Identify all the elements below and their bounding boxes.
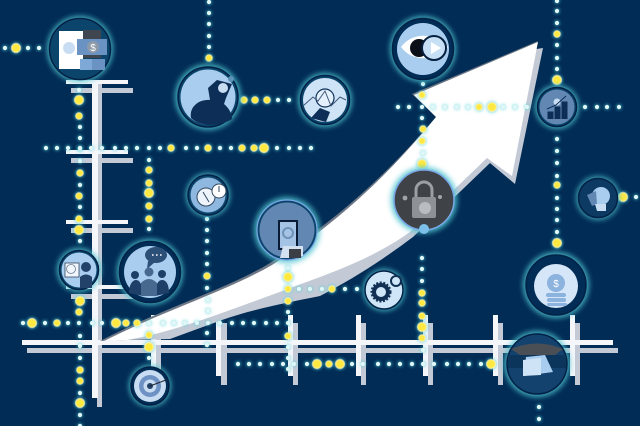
dotted line: row y364 [236,360,495,368]
icon: bar chart growth [535,85,579,129]
grid of white and grey bars [22,80,618,407]
dotted line: row y289 [297,286,359,292]
icon: coin stack [523,252,589,318]
dotted line: vertical x422 upper [418,82,426,168]
dotted line: bottom right [537,405,541,421]
icon: audience group [117,239,183,305]
arrow shadow [127,48,543,340]
icon: presenter at board [57,248,101,292]
arrow top edge [100,41,538,341]
dotted line: far right [619,193,638,201]
dotted line: row y107 [396,103,621,111]
dotted line: vertical x557 [553,0,561,247]
dotted line: top centre vertical [206,0,212,61]
dollar sign: $ [90,43,96,54]
arrow body [104,42,538,341]
icon: tickets [504,331,570,397]
dotted line: vertical x149 [145,158,153,231]
icon: rocket / tools [175,64,241,130]
dotted line: vertical x287 [284,266,292,371]
dotted line: left vertical [75,88,84,426]
icon: chart with light bulb [298,73,352,127]
dotted line: top left [3,44,41,52]
dotted line: vertical x208 [204,217,210,347]
spark [419,224,429,234]
dotted line: row y323 [21,319,290,327]
icon: stopwatches [186,173,230,217]
growth arrow [100,41,543,341]
ellipsis [152,254,162,256]
icon: target [129,365,171,407]
icon: puzzle head [576,176,620,220]
icon: tablet in hand [254,197,320,263]
icon: gears [363,269,405,311]
dotted line: below target [145,332,153,360]
dotted line: row y100 [241,97,291,103]
dotted line: row y148 [44,144,313,152]
dollar sign: $ [553,279,559,290]
icon: money and document [47,16,113,82]
icon: padlock [391,167,457,234]
icon: eye and magnifier [390,16,456,82]
dotted line: vertical x422 lower [418,256,426,352]
